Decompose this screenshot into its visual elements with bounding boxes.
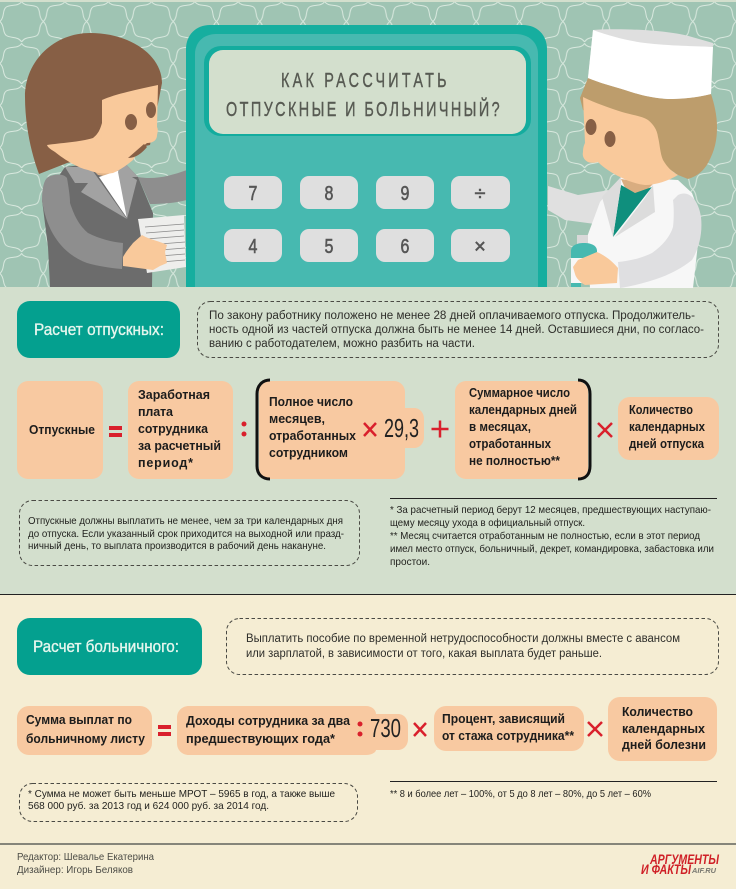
number: 29,3: 29,3 <box>384 413 419 443</box>
footnotes: vacation pay <box>390 498 717 568</box>
logo: AIF: И ФАКТЫ <box>641 861 692 877</box>
credits: Редактор: Шевалье Екатерина <box>17 851 154 863</box>
box: partial months: не полностью** <box>469 454 560 468</box>
box: vacation days <box>618 397 719 460</box>
illustration: nurse <box>548 29 717 288</box>
credits: Дизайнер: Игорь Беляков <box>17 864 133 876</box>
box: salary: плата <box>138 405 174 419</box>
logo: AIF: AIF.RU <box>691 866 717 875</box>
box: sick pay sum <box>17 706 152 755</box>
box: income: предшествующих года* <box>186 732 335 746</box>
calculator screen <box>204 46 531 136</box>
box: full months <box>259 381 424 479</box>
callout: payment deadline: Отпускные должны выплатить не менее, чем за три календарных дня <box>28 515 343 527</box>
box: full months: месяцев, <box>269 412 325 426</box>
calculator keys: × <box>474 236 486 258</box>
callout: payment limits: * Сумма не может быть меньше МРОТ – 5965 в год, а также выше <box>28 788 335 800</box>
box: sick pay sum: больничному листу <box>26 732 145 746</box>
calculator keys: 5 <box>325 235 333 257</box>
box: vacation pay: Отпускные <box>29 423 95 437</box>
heading: sick pay: Расчет больничного: <box>33 637 179 656</box>
box: partial months: Суммарное число <box>469 386 570 400</box>
text block: sick pay timing <box>226 618 718 674</box>
box: full months: сотрудником <box>269 446 348 460</box>
callout: payment limits: 568 000 руб. за 2013 год и 624 000 руб. за 2014 год. <box>28 800 269 812</box>
illustration: accountant woman <box>25 33 187 287</box>
formula: vacation pay <box>17 380 719 479</box>
operator: multiply <box>414 723 426 736</box>
box: partial months <box>455 381 588 479</box>
box: sick days <box>608 697 717 761</box>
operator: multiply <box>588 722 602 736</box>
callout: payment deadline: до отпуска. Если указанный срок приходится на выходной или празд- <box>28 528 344 540</box>
formula: sick pay <box>17 697 717 761</box>
title: КАК РАССЧИТАТЬ <box>281 69 447 92</box>
footnotes: vacation pay: щему месяцу ухода в официальный отпуск. <box>390 517 585 529</box>
operator: multiply <box>364 423 376 436</box>
text block: sick pay timing: Выплатить пособие по временной нетрудоспособности должны вместе с авансом <box>246 633 680 645</box>
calculator keys: 8 <box>325 182 333 204</box>
box: salary: Заработная <box>138 388 210 402</box>
box: salary: за расчетный <box>138 439 221 453</box>
footnotes: vacation pay: простои. <box>390 556 430 568</box>
calculator keys: 9 <box>401 182 409 204</box>
box: full months: Полное число <box>269 395 353 409</box>
calculator keys: 7 <box>249 182 257 204</box>
footnotes: vacation pay: имел место отпуск, больничный, декрет, командировка, забастовка или <box>390 543 714 555</box>
operator: equals <box>158 725 171 736</box>
title <box>226 69 500 121</box>
box: income: Доходы сотрудника за два <box>186 714 351 728</box>
panel: header illustration <box>0 0 736 290</box>
operator: plus <box>432 420 448 438</box>
box: partial months: отработанных <box>469 437 551 451</box>
box: sick days: дней болезни <box>622 738 706 752</box>
box: sick days: календарных <box>622 722 705 736</box>
calculator keys <box>224 176 510 262</box>
number: 730: 730 <box>370 713 401 743</box>
calculator keys: 4 <box>249 235 257 257</box>
box: partial months: в месяцах, <box>469 420 531 434</box>
text block: vacation rules: По закону работнику положено не менее 28 дней оплачиваемого отпуска. Продолжитель- <box>209 310 695 322</box>
text block: vacation rules: ванию с работодателем, можно разбить на части. <box>209 338 475 350</box>
calculator keys: ÷ <box>475 183 486 205</box>
text block: vacation rules <box>198 302 718 358</box>
title: ОТПУСКНЫЕ И БОЛЬНИЧНЫЙ? <box>226 98 500 121</box>
heading: vacation pay: Расчет отпускных: <box>34 320 164 339</box>
box: full months: отработанных <box>269 429 356 443</box>
footnote: sick pay percent: ** 8 и более лет – 100%, от 5 до 8 лет – 80%, до 5 лет – 60% <box>390 788 651 800</box>
calculator keys: 6 <box>401 235 409 257</box>
text block: vacation rules: ность одной из частей отпуска должна быть не менее 14 дней. Оставшиеся дни, по согласо- <box>209 324 704 336</box>
box: partial months: календарных дней <box>469 403 577 417</box>
box: sick days: Количество <box>622 705 693 719</box>
box: vacation pay <box>17 381 103 479</box>
box: salary: период* <box>138 456 193 470</box>
callout: payment deadline: ничный день, то выплата производится в рабочий день накануне. <box>28 540 326 552</box>
footnotes: vacation pay: ** Месяц считается отработанным не полностью, если в этот период <box>390 530 700 542</box>
bracket: left <box>257 380 270 479</box>
illustration: calculator <box>186 25 547 287</box>
box: vacation days: дней отпуска <box>629 437 705 451</box>
callout: payment limits <box>20 784 358 822</box>
box: percent <box>434 706 584 751</box>
box: vacation days: Количество <box>629 403 693 417</box>
box: sick pay sum: Сумма выплат по <box>26 713 132 727</box>
operator: multiply <box>598 423 612 437</box>
operator: divide <box>358 722 362 736</box>
logo: AIF <box>641 851 720 877</box>
box: salary <box>128 381 233 479</box>
heading: sick pay <box>17 618 202 675</box>
text block: sick pay timing: или зарплатой, в зависимости от того, какая выплата будет раньше. <box>246 648 602 660</box>
box: percent: Процент, зависящий <box>442 712 565 726</box>
credits <box>17 851 154 876</box>
heading: vacation pay <box>17 301 180 358</box>
bracket: right <box>578 380 590 479</box>
panel: vacation pay <box>0 289 736 594</box>
footnotes: vacation pay: * За расчетный период берут 12 месяцев, предшествующих наступаю- <box>390 504 711 516</box>
operator: divide <box>242 422 246 436</box>
box: salary: сотрудника <box>138 422 209 436</box>
panel: sick pay <box>0 594 736 889</box>
box: income <box>177 706 408 755</box>
operator: equals <box>109 426 122 437</box>
box: vacation days: календарных <box>629 420 705 434</box>
callout: payment deadline <box>20 500 360 566</box>
box: percent: от стажа сотрудника** <box>442 729 574 743</box>
